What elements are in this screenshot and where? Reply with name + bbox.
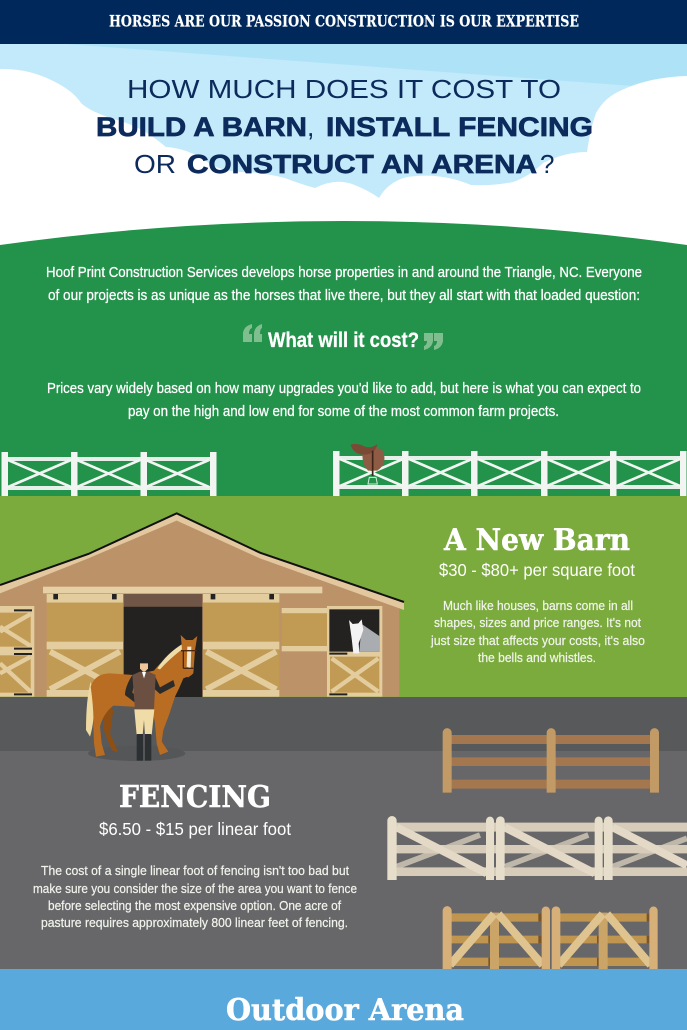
right sliding door	[203, 594, 279, 697]
title line 2: ,	[307, 112, 314, 142]
barn description: shapes, sizes and price ranges. It's not	[434, 615, 641, 630]
closing quote mark	[424, 333, 443, 350]
horse far legs	[103, 705, 165, 753]
brown rail fence	[443, 728, 659, 793]
barn body	[0, 521, 399, 697]
opening quote mark	[243, 324, 262, 342]
barn description	[430, 598, 645, 665]
barn	[0, 513, 404, 697]
sky background	[0, 44, 687, 224]
horse body	[91, 647, 195, 757]
title	[96, 74, 593, 179]
title line 3: CONSTRUCT AN ARENA	[187, 149, 537, 179]
white fence right	[333, 451, 686, 496]
fencing description: The cost of a single linear foot of fencing isn't too bad but	[41, 863, 349, 878]
doorway	[124, 594, 202, 697]
lawn panel	[0, 496, 687, 697]
title line 3: ?	[540, 149, 554, 179]
banner text: HORSES ARE OUR PASSION CONSTRUCTION IS OUR EXPERTISE	[109, 12, 579, 30]
new barn text	[430, 523, 645, 665]
rider	[125, 654, 175, 761]
left sliding door	[47, 594, 123, 697]
heading: fencing: FENCING	[119, 780, 271, 815]
fencing description: before selecting the most expensive option. One acre of	[48, 898, 341, 913]
ground shadow	[88, 746, 185, 761]
fencing description	[33, 863, 357, 930]
pricing paragraph: pay on the high and low end for some of the most common farm projects.	[128, 403, 559, 420]
top banner	[0, 0, 687, 44]
roof	[0, 513, 404, 610]
horse head	[181, 635, 197, 677]
icon: saddle	[351, 444, 384, 484]
barn price: $30 - $80+ per square foot	[439, 560, 635, 580]
horse and rider	[86, 635, 197, 761]
title line 3: OR	[134, 149, 176, 179]
title line 2: INSTALL FENCING	[326, 112, 593, 142]
stall window with grey horse	[327, 606, 382, 697]
fencing description: make sure you consider the size of the area you want to fence	[33, 881, 357, 896]
shutter	[282, 608, 328, 651]
barn description: the bells and whistles.	[478, 650, 596, 665]
horse mane	[157, 640, 195, 669]
header beam	[43, 587, 322, 593]
cream cross fence	[387, 816, 687, 880]
heading: a new barn: A New Barn	[443, 523, 630, 558]
tan gate fence	[443, 906, 658, 969]
intro paragraph	[46, 264, 642, 304]
quote: what will it cost: What will it cost?	[268, 329, 419, 352]
horse tail	[86, 682, 94, 737]
driveway	[0, 697, 687, 969]
white fence left	[2, 452, 216, 496]
barn description: Much like houses, barns come in all	[443, 598, 633, 613]
fencing text	[33, 780, 357, 930]
title line 2: BUILD A BARN	[96, 112, 307, 142]
barn description: just size that affects your costs, it's also	[430, 633, 645, 648]
fencing price: $6.50 - $15 per linear foot	[99, 819, 291, 839]
clouds	[0, 69, 687, 260]
left stall doors	[0, 606, 34, 697]
intro paragraph: of our projects is as unique as the horses that live there, but they all start with that loaded question:	[48, 287, 640, 304]
green hill panel	[0, 221, 687, 497]
heading: outdoor arena: Outdoor Arena	[226, 993, 464, 1028]
pricing paragraph	[47, 380, 641, 420]
panel: outdoor arena	[0, 969, 687, 1030]
title line 1: HOW MUCH DOES IT COST TO	[127, 74, 561, 104]
fencing description: pasture requires approximately 800 linear feet of fencing.	[41, 915, 348, 930]
